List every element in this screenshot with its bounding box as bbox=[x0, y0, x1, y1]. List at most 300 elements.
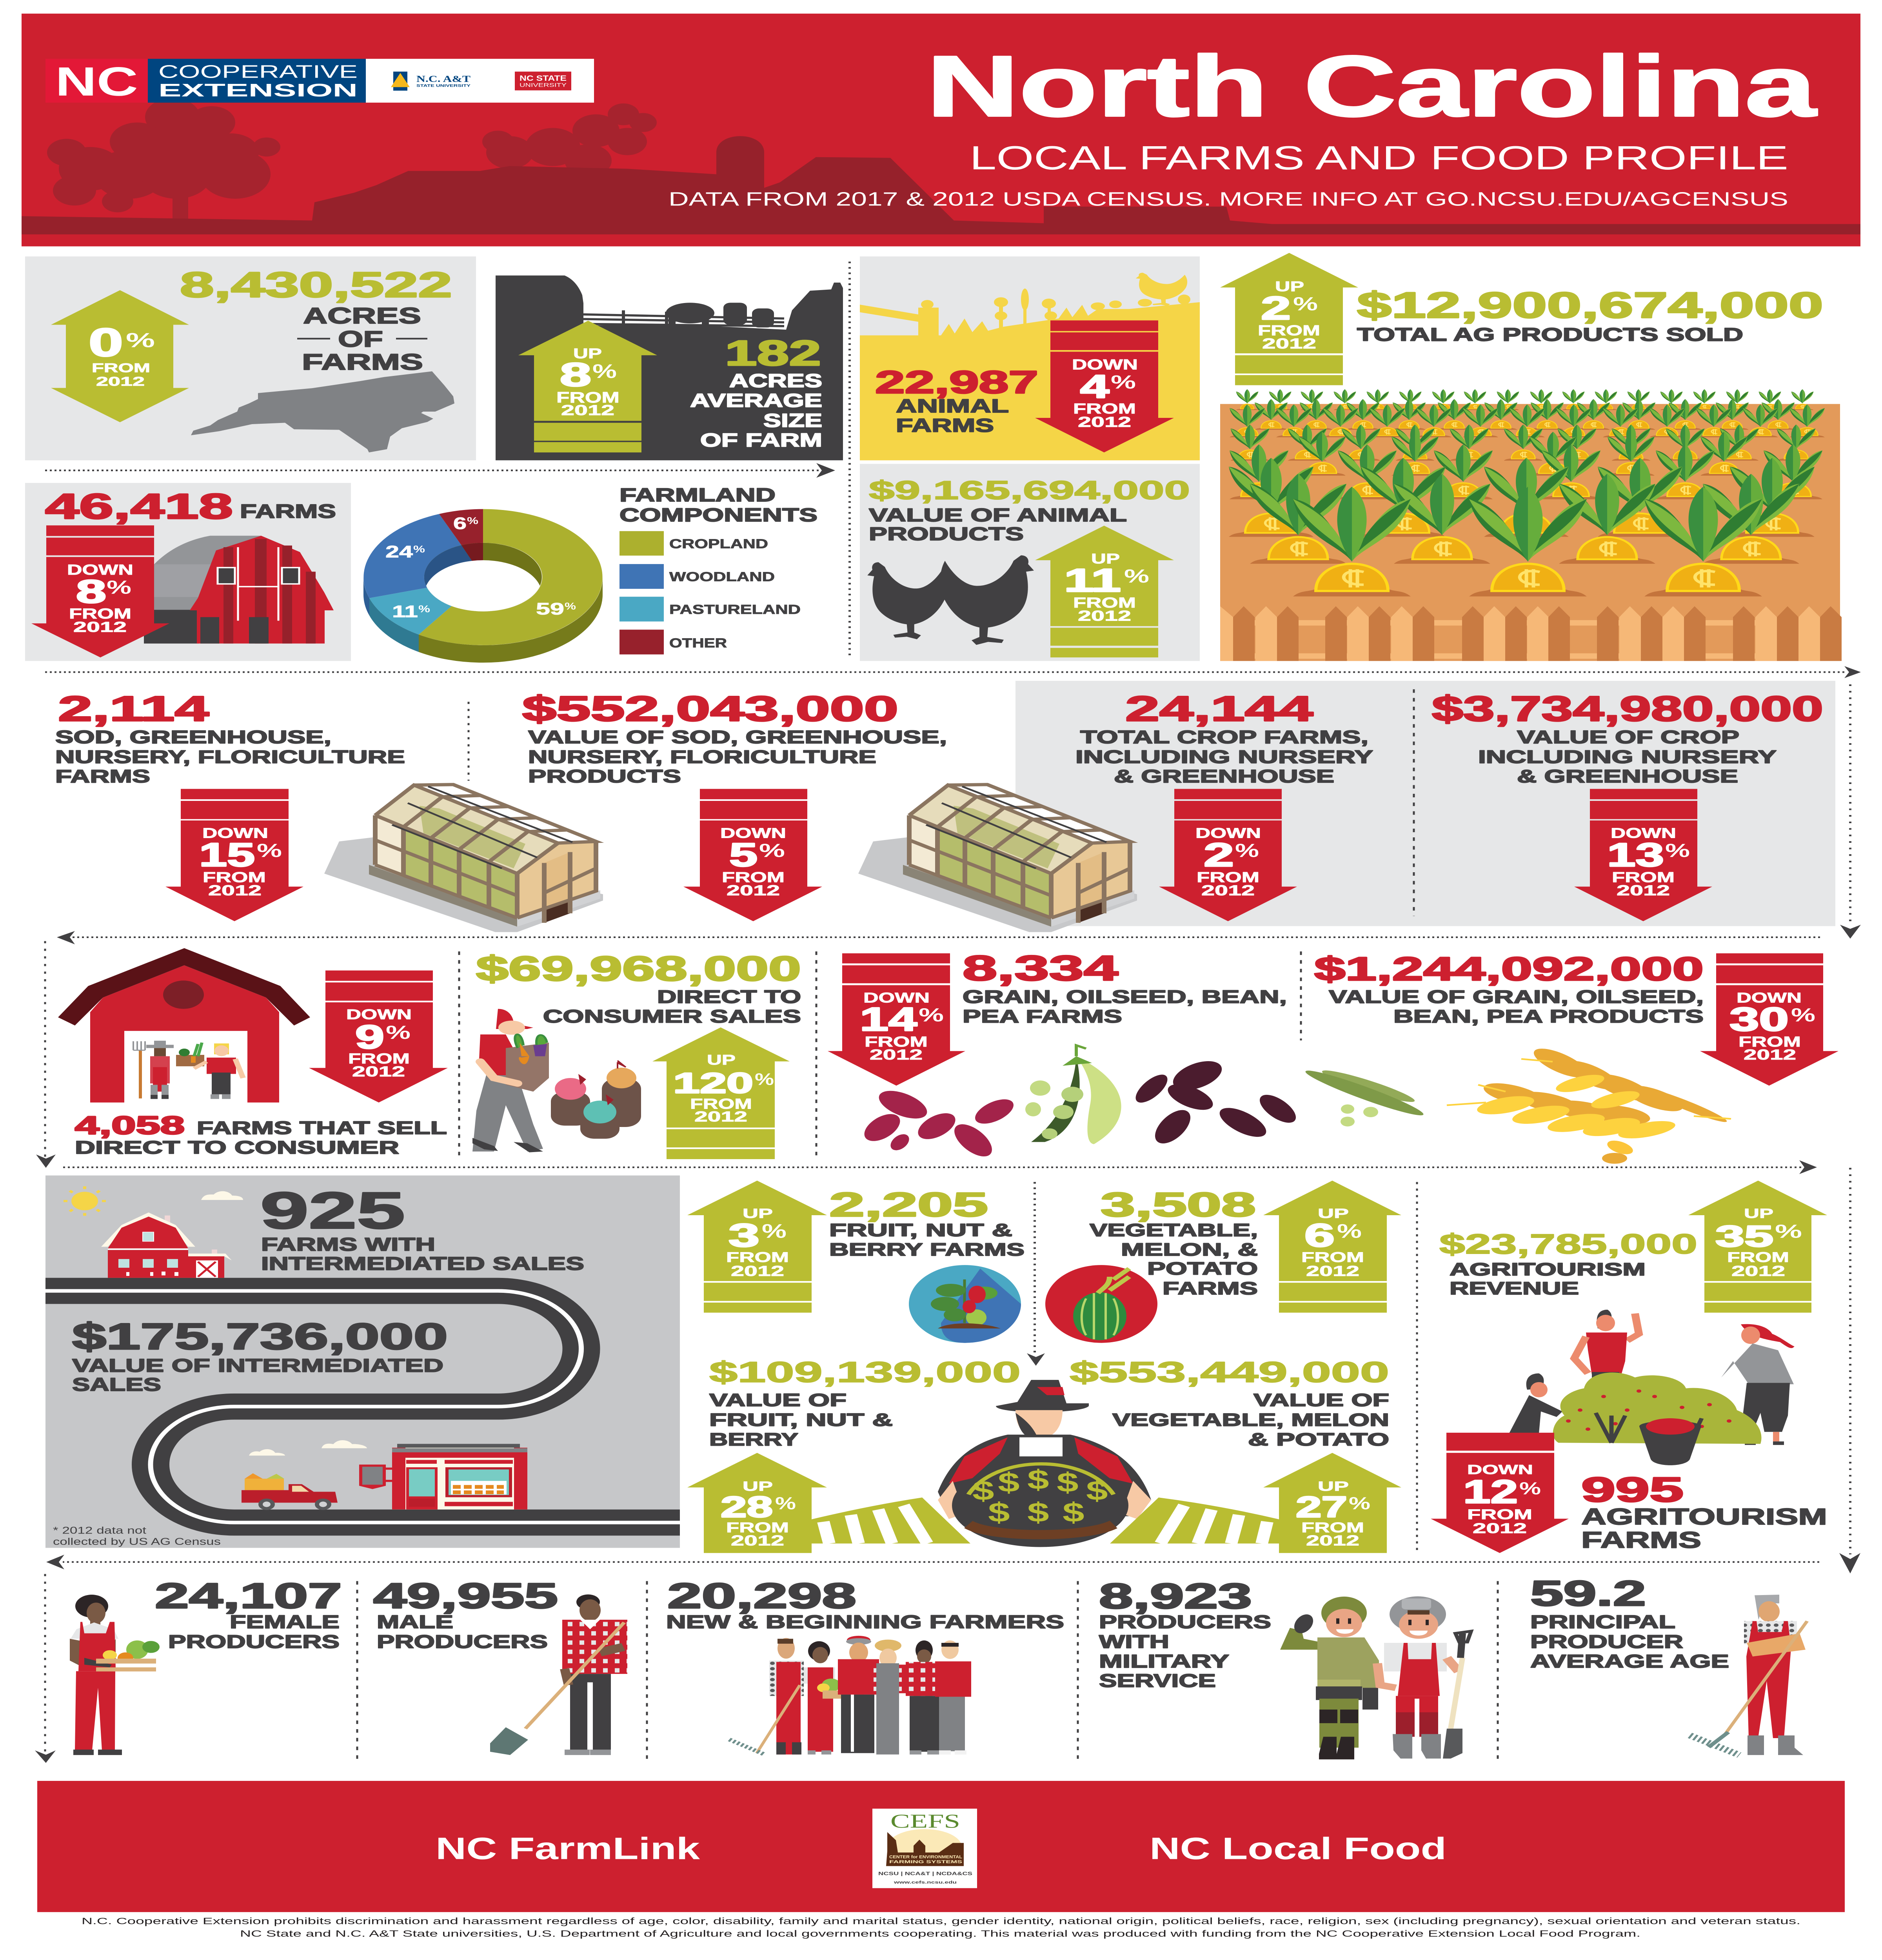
arrow: row five flow bbox=[46, 1555, 1819, 1569]
panel: crop farms background bbox=[1015, 681, 1835, 926]
agritourism revenue figure: $23,785,000 bbox=[1439, 1228, 1697, 1259]
animal farms figure: 22,987 bbox=[875, 365, 1038, 400]
up arrow: 27% from 2012: 27 bbox=[1296, 1490, 1347, 1523]
down arrow: 13% from 2012 bbox=[1574, 789, 1712, 921]
vegetable value label: VALUE OF bbox=[1253, 1390, 1389, 1410]
fruit value label: VALUE OF bbox=[709, 1390, 847, 1410]
farm count figure: 46,418 bbox=[45, 486, 233, 526]
sod value label bbox=[528, 727, 947, 786]
donut chart: farmland components bbox=[363, 509, 603, 662]
sod value label: PRODUCTS bbox=[528, 766, 681, 786]
logo lockup: EXTENSION bbox=[158, 80, 358, 100]
picket fence bbox=[1220, 606, 1842, 661]
female producer figure: 24,107 bbox=[155, 1576, 342, 1615]
agritourism revenue label: AGRITOURISM bbox=[1450, 1259, 1646, 1279]
logo lockup: STATE UNIVERSITY bbox=[416, 84, 471, 88]
grain farms label: PEA FARMS bbox=[963, 1006, 1122, 1027]
down arrow: 2% from 2012: 2 bbox=[1204, 837, 1234, 873]
panel: acres of farms bbox=[25, 256, 476, 460]
direct sales label bbox=[543, 987, 801, 1027]
female producer label bbox=[168, 1612, 340, 1652]
up arrow: 120% from 2012: 120 bbox=[673, 1067, 753, 1099]
section: direct to consumer farms bbox=[58, 948, 448, 1158]
person crouching bbox=[1509, 1373, 1562, 1433]
down arrow: 9% from 2012: 2012 bbox=[352, 1063, 405, 1080]
down arrow: 15% from 2012: FROM bbox=[203, 869, 266, 886]
illustration: soldier saluting bbox=[1280, 1597, 1379, 1759]
subtitle: LOCAL FARMS AND FOOD PROFILE bbox=[970, 139, 1788, 176]
down arrow: 9% from 2012: FROM bbox=[348, 1050, 410, 1067]
legend: farmland components bbox=[619, 484, 817, 654]
icon: North Carolina map bbox=[191, 371, 454, 452]
crop value label: VALUE OF CROP bbox=[1517, 727, 1739, 747]
footnote: collected by US AG Census bbox=[53, 1536, 221, 1547]
legend item: cropland bbox=[619, 531, 768, 555]
up arrow: 8% from 2012: FROM bbox=[556, 389, 619, 406]
crop farms label: TOTAL CROP FARMS, bbox=[1080, 727, 1368, 747]
down arrow: 30% from 2012 bbox=[1700, 953, 1838, 1085]
slice label: 59%: % bbox=[565, 601, 576, 612]
fruit farms figure: 2,205 bbox=[829, 1186, 988, 1223]
crop value label bbox=[1478, 727, 1777, 786]
vegetable farms figure: 3,508 bbox=[1101, 1186, 1256, 1223]
down arrow: 15% from 2012: 2012 bbox=[208, 882, 262, 898]
customer bbox=[194, 1044, 243, 1099]
fruit value label: BERRY bbox=[709, 1430, 798, 1450]
down arrow: 4% from 2012: DOWN bbox=[1072, 356, 1138, 372]
dollar signs: $ bbox=[988, 1497, 1010, 1528]
up arrow: 11% from 2012: % bbox=[1124, 565, 1149, 587]
icon: watermelon bbox=[1045, 1265, 1157, 1343]
up arrow: 35% from 2012: FROM bbox=[1727, 1249, 1789, 1265]
person standing bbox=[1574, 1310, 1639, 1386]
arrow: vertical divider flow bbox=[848, 261, 851, 655]
footnote: * 2012 data not bbox=[53, 1525, 146, 1536]
illustration: kidney beans bbox=[857, 1085, 1020, 1161]
down arrow: 2% from 2012 bbox=[1159, 789, 1297, 921]
agritourism revenue label bbox=[1450, 1259, 1646, 1299]
up arrow: 11% from 2012: 11 bbox=[1064, 562, 1121, 599]
title: North Carolina bbox=[926, 38, 1817, 134]
illustration: farmer holding basket of dollars bbox=[938, 1380, 1151, 1547]
up arrow: 28% from 2012: UP bbox=[743, 1479, 773, 1494]
legend item: woodland: WOODLAND bbox=[669, 570, 775, 584]
intermediated farms figure: 925 bbox=[260, 1181, 405, 1240]
logo lockup: N.C. A&T bbox=[416, 74, 471, 84]
up arrow: 28% from 2012: FROM bbox=[726, 1520, 789, 1535]
military producers label: PRODUCERS bbox=[1099, 1612, 1271, 1632]
section: female producers bbox=[70, 1576, 342, 1755]
legal disclaimer: N.C. Cooperative Extension prohibits discrimination and harassment regardless of age, color, disability, family and marital status, gender identity, national origin, political beliefs, race, religion, sex (including pregnancy), sexual orientation and veteran status. bbox=[82, 1916, 1800, 1926]
icon: greenhouse bbox=[858, 784, 1137, 932]
agritourism farms figure: 995 bbox=[1581, 1470, 1684, 1509]
section: value of crops bbox=[1432, 689, 1823, 921]
down arrow: 14% from 2012 bbox=[828, 953, 965, 1085]
logo lockup: UNIVERSITY bbox=[520, 82, 567, 88]
agritourism farms label bbox=[1581, 1504, 1827, 1553]
fruit farms label: BERRY FARMS bbox=[829, 1240, 1025, 1259]
arrow: row two flow bbox=[45, 666, 1861, 678]
slice label: 6%: % bbox=[467, 515, 478, 526]
down arrow: 9% from 2012: % bbox=[386, 1022, 411, 1043]
up arrow: 35% from 2012: % bbox=[1775, 1220, 1802, 1242]
icon: barn with farmers bbox=[58, 948, 310, 1102]
section: value of grain oilseed bean pea bbox=[1314, 951, 1838, 1164]
data source line: DATA FROM 2017 & 2012 USDA CENSUS. MORE INFO AT GO.NCSU.EDU/AGCENSUS bbox=[669, 188, 1788, 210]
crop value label: INCLUDING NURSERY bbox=[1478, 747, 1777, 767]
up arrow: 3% from 2012: UP bbox=[743, 1206, 773, 1221]
up arrow: 120% from 2012: UP bbox=[707, 1052, 736, 1068]
icon: cloud bbox=[201, 1191, 243, 1200]
up arrow: 3% from 2012: 3 bbox=[728, 1217, 759, 1254]
slice label: 6%: 6 bbox=[453, 514, 467, 533]
down arrow: 15% from 2012: 15 bbox=[199, 837, 255, 873]
down arrow: 13% from 2012: 13 bbox=[1607, 837, 1664, 873]
up arrow: 6% from 2012: FROM bbox=[1301, 1249, 1364, 1265]
icon: clouds over road bbox=[249, 1440, 367, 1455]
down arrow: 13% from 2012: 2012 bbox=[1617, 882, 1670, 898]
icon: red farmhouse bbox=[101, 1212, 232, 1278]
down arrow: 9% from 2012 bbox=[309, 971, 448, 1102]
vegetable value label: & POTATO bbox=[1248, 1430, 1389, 1450]
illustration: wheat bbox=[1447, 1044, 1731, 1164]
grain value figure: $1,244,092,000 bbox=[1314, 951, 1704, 987]
up arrow: 6% from 2012: 2012 bbox=[1306, 1263, 1359, 1279]
dollar signs: $ bbox=[1063, 1497, 1085, 1528]
vegetable value label: VEGETABLE, MELON bbox=[1112, 1410, 1389, 1430]
fruit value figure: $109,139,000 bbox=[709, 1356, 1021, 1388]
illustration: woman with crate bbox=[70, 1595, 160, 1755]
up arrow: 8% from 2012: 2012 bbox=[561, 402, 614, 418]
military producers label: WITH bbox=[1099, 1632, 1169, 1652]
illustration: man with shovel bbox=[490, 1594, 627, 1755]
up arrow: 2% from 2012 bbox=[1220, 253, 1358, 385]
footer banner bbox=[37, 1781, 1845, 1912]
section: sod and greenhouse farms bbox=[55, 689, 603, 932]
logo lockup: NC STATE bbox=[520, 74, 567, 83]
up arrow: 2% from 2012: % bbox=[1293, 293, 1318, 314]
up arrow: 120% from 2012: FROM bbox=[690, 1096, 752, 1112]
legend item: other: OTHER bbox=[669, 636, 727, 650]
intermediated value label: SALES bbox=[72, 1374, 161, 1395]
animal value label: PRODUCTS bbox=[869, 524, 1024, 544]
down arrow: 12% from 2012: 2012 bbox=[1473, 1521, 1527, 1536]
slice label: 24% bbox=[385, 543, 425, 561]
up arrow: 2% from 2012: 2 bbox=[1261, 290, 1291, 326]
logo lockup: NC bbox=[55, 59, 138, 104]
average size label: AVERAGE bbox=[690, 390, 822, 411]
legend item: pastureland: PASTURELAND bbox=[669, 602, 801, 617]
sod farms figure: 2,114 bbox=[58, 689, 209, 728]
rake bbox=[729, 1685, 800, 1755]
section: vegetable melon potato farms bbox=[1045, 1181, 1401, 1343]
section: agritourism bbox=[1431, 1181, 1827, 1553]
up arrow: 2% from 2012: 2012 bbox=[1262, 335, 1316, 352]
military producers label bbox=[1099, 1612, 1271, 1691]
sod farms label: FARMS bbox=[55, 766, 150, 786]
icon: pickup truck bbox=[242, 1473, 338, 1510]
arrow: right side flow bbox=[1840, 684, 1861, 938]
fruit value label: FRUIT, NUT & bbox=[709, 1410, 893, 1430]
farmer three bbox=[838, 1636, 879, 1753]
down arrow: 5% from 2012 bbox=[683, 789, 822, 921]
illustration: shopper with grocery bag bbox=[472, 1009, 549, 1152]
icon: yellow farmyard bbox=[860, 273, 1200, 460]
road bbox=[45, 1291, 680, 1523]
farmer one bbox=[769, 1638, 804, 1755]
animal value figure: $9,165,694,000 bbox=[869, 475, 1190, 505]
animal value label bbox=[869, 505, 1127, 544]
down arrow: 30% from 2012: DOWN bbox=[1737, 990, 1802, 1006]
dollar signs: $ bbox=[1027, 1465, 1049, 1495]
logo: CEFS: www.cefs.ncsu.edu bbox=[894, 1880, 957, 1884]
fruit farms label bbox=[829, 1220, 1025, 1259]
slice label: 24%: 24 bbox=[385, 543, 413, 561]
arrow: left side flow bbox=[36, 941, 56, 1168]
icon: strawberry plant bbox=[909, 1265, 1021, 1343]
acres of farms label bbox=[297, 303, 427, 375]
average size label: SIZE bbox=[763, 410, 822, 431]
up arrow: 3% from 2012: 2012 bbox=[731, 1263, 784, 1279]
military producers label: SERVICE bbox=[1099, 1671, 1216, 1691]
vegetable farms label: MELON, & bbox=[1121, 1240, 1258, 1259]
section: producer average age bbox=[1530, 1573, 1807, 1755]
animal farms label bbox=[896, 395, 1009, 436]
direct sale farms figure: 4,058 bbox=[75, 1111, 185, 1140]
footer partner: NC Local Food: NC Local Food bbox=[1150, 1831, 1446, 1866]
panel: total farms bbox=[25, 483, 351, 661]
ag products label: TOTAL AG PRODUCTS SOLD bbox=[1357, 324, 1743, 345]
arrow: left side lower flow bbox=[35, 1574, 56, 1763]
down arrow: 15% from 2012 bbox=[165, 789, 303, 921]
direct sale farms label: DIRECT TO CONSUMER bbox=[75, 1138, 399, 1158]
header banner bbox=[22, 14, 1860, 246]
section: new and beginning farmers bbox=[666, 1576, 1064, 1755]
down arrow: 5% from 2012: 5 bbox=[729, 837, 758, 873]
section: grain oilseed bean pea farms bbox=[828, 948, 1427, 1161]
down arrow: 13% from 2012: FROM bbox=[1612, 869, 1675, 886]
icon: greenhouse bbox=[324, 784, 603, 932]
up arrow: 11% from 2012 bbox=[1035, 526, 1174, 657]
icon: red barn bbox=[144, 536, 334, 644]
grain value label bbox=[1329, 987, 1704, 1027]
fruit value label bbox=[709, 1390, 893, 1450]
grain farms label bbox=[963, 987, 1287, 1027]
agritourism farms label: FARMS bbox=[1581, 1528, 1701, 1553]
fruit farms label: FRUIT, NUT & bbox=[829, 1220, 1012, 1240]
down arrow: 2% from 2012: % bbox=[1235, 840, 1259, 861]
average age label: PRINCIPAL bbox=[1530, 1612, 1675, 1632]
double arrow: 0% from 2012: 0 bbox=[89, 320, 123, 365]
up arrow: 8% from 2012 bbox=[518, 321, 657, 452]
sod farms label: NURSERY, FLORICULTURE bbox=[55, 747, 405, 767]
down arrow: 8% from 2012: DOWN bbox=[67, 562, 133, 578]
average size label bbox=[690, 370, 822, 450]
up arrow: 6% from 2012 bbox=[1263, 1181, 1401, 1313]
footer partner: NC FarmLink: NC FarmLink bbox=[436, 1831, 700, 1866]
up arrow: 6% from 2012: 6 bbox=[1304, 1217, 1335, 1254]
illustration: older farmer with rake bbox=[1690, 1595, 1807, 1755]
vegetable farms label: FARMS bbox=[1163, 1279, 1258, 1299]
down arrow: 8% from 2012 bbox=[31, 525, 169, 657]
up arrow: 3% from 2012: FROM bbox=[726, 1249, 789, 1265]
logo: CEFS: NCSU | NCA&T | NCDA&CS bbox=[878, 1871, 972, 1877]
up arrow: 28% from 2012: 2012 bbox=[731, 1532, 784, 1548]
male producer label: MALE bbox=[377, 1612, 453, 1632]
arrow: down to row five bbox=[1839, 1553, 1860, 1573]
section: value of vegetable melon potato bbox=[1070, 1356, 1401, 1553]
crate of vegetables bbox=[176, 1043, 204, 1066]
arrow: row three flow bbox=[57, 931, 1820, 944]
animal value label: VALUE OF ANIMAL bbox=[869, 505, 1127, 525]
dollar signs: $ bbox=[1057, 1467, 1079, 1498]
up arrow: 2% from 2012: UP bbox=[1275, 279, 1304, 294]
bush berries bbox=[1566, 1389, 1731, 1431]
acres of farms label: FARMS bbox=[302, 349, 423, 375]
logo: CEFS bbox=[872, 1809, 977, 1888]
intermediated value label bbox=[72, 1355, 443, 1395]
section: male producers bbox=[373, 1576, 627, 1755]
agritourism farms label: AGRITOURISM bbox=[1581, 1504, 1827, 1530]
down arrow: 12% from 2012: FROM bbox=[1467, 1506, 1532, 1523]
logo: CEFS: FARMING SYSTEMS bbox=[889, 1859, 962, 1864]
average age label: AVERAGE AGE bbox=[1530, 1651, 1729, 1672]
down arrow: 13% from 2012: DOWN bbox=[1611, 825, 1676, 841]
agritourism revenue label: REVENUE bbox=[1450, 1279, 1579, 1299]
down arrow: 4% from 2012: FROM bbox=[1073, 400, 1136, 417]
average size label: ACRES bbox=[729, 370, 822, 391]
down arrow: 14% from 2012: DOWN bbox=[863, 990, 930, 1006]
up arrow: 120% from 2012: % bbox=[755, 1070, 774, 1089]
down arrow: 14% from 2012: FROM bbox=[865, 1033, 928, 1050]
slice label: 11%: 11 bbox=[392, 602, 418, 621]
direct sales label: CONSUMER SALES bbox=[543, 1006, 801, 1027]
down arrow: 30% from 2012: 2012 bbox=[1744, 1047, 1796, 1063]
female producer label: FEMALE bbox=[230, 1612, 340, 1632]
illustration: farmer with spade bbox=[1377, 1596, 1471, 1759]
down arrow: 15% from 2012: % bbox=[257, 840, 282, 861]
down arrow: 8% from 2012: % bbox=[107, 576, 131, 598]
average size label: OF FARM bbox=[700, 429, 822, 450]
up arrow: 8% from 2012: UP bbox=[573, 346, 602, 361]
down arrow: 5% from 2012: DOWN bbox=[720, 825, 786, 841]
up arrow: 8% from 2012: % bbox=[592, 361, 617, 382]
vegetable farms label bbox=[1090, 1220, 1258, 1299]
legend item: pastureland bbox=[619, 597, 801, 621]
crop value label: & GREENHOUSE bbox=[1517, 766, 1738, 786]
legend heading bbox=[619, 484, 817, 525]
grain farms figure: 8,334 bbox=[963, 948, 1118, 988]
section: value of fruit nut berry bbox=[687, 1356, 1021, 1553]
grain farms label: GRAIN, OILSEED, BEAN, bbox=[963, 987, 1287, 1007]
icon: market storefront bbox=[359, 1444, 527, 1510]
down arrow: 14% from 2012: 14 bbox=[860, 1001, 917, 1038]
section: military service producers bbox=[1099, 1576, 1471, 1759]
down arrow: 9% from 2012: DOWN bbox=[346, 1007, 412, 1022]
up arrow: 8% from 2012: 8 bbox=[560, 356, 591, 393]
crop farms label: & GREENHOUSE bbox=[1114, 766, 1334, 786]
grain value label: VALUE OF GRAIN, OILSEED, bbox=[1329, 987, 1704, 1007]
acres figure: 8,430,522 bbox=[180, 265, 452, 305]
down arrow: 4% from 2012: % bbox=[1111, 371, 1136, 392]
up arrow: 11% from 2012: UP bbox=[1091, 551, 1120, 567]
slice label: 6% bbox=[453, 514, 478, 533]
slice label: 11% bbox=[392, 602, 430, 621]
direct sales figure: $69,968,000 bbox=[476, 949, 801, 988]
illustration: black beans bbox=[1130, 1055, 1303, 1147]
panel: intermediated sales bbox=[45, 1176, 680, 1548]
crop value figure: $3,734,980,000 bbox=[1432, 689, 1823, 728]
down arrow: 4% from 2012 bbox=[1035, 320, 1174, 452]
direct sale farms label: FARMS THAT SELL bbox=[197, 1118, 447, 1138]
section: direct to consumer sales bbox=[472, 949, 801, 1159]
down arrow: 30% from 2012: 30 bbox=[1729, 1001, 1789, 1038]
illustration: green pods bbox=[1302, 1066, 1427, 1127]
male producer label: PRODUCERS bbox=[377, 1632, 548, 1652]
down arrow: 2% from 2012: 2012 bbox=[1201, 882, 1255, 898]
legend heading: COMPONENTS bbox=[619, 504, 817, 525]
icon: crop rows left bbox=[812, 1497, 970, 1544]
down arrow: 5% from 2012: % bbox=[759, 840, 785, 861]
down arrow: 8% from 2012: 2012 bbox=[73, 619, 127, 635]
up arrow: 11% from 2012: 2012 bbox=[1078, 607, 1131, 624]
vegetable value label bbox=[1112, 1390, 1389, 1450]
illustration: pea pod bbox=[1025, 1045, 1121, 1144]
new farmers label: NEW & BEGINNING FARMERS bbox=[666, 1612, 1064, 1632]
up arrow: 27% from 2012: UP bbox=[1318, 1479, 1349, 1494]
up arrow: 28% from 2012: % bbox=[775, 1494, 796, 1513]
animal farms label: FARMS bbox=[896, 414, 994, 436]
bush bbox=[1553, 1372, 1761, 1444]
up arrow: 3% from 2012 bbox=[687, 1181, 827, 1313]
down arrow: 12% from 2012: % bbox=[1519, 1478, 1541, 1498]
up arrow: 28% from 2012 bbox=[687, 1453, 827, 1553]
double arrow: 0% from 2012: 2012 bbox=[96, 374, 145, 388]
vegetable farms label: POTATO bbox=[1147, 1259, 1258, 1279]
farm silhouette bbox=[22, 98, 1860, 234]
female producer label: PRODUCERS bbox=[168, 1632, 340, 1652]
farmer with pitchfork bbox=[133, 1041, 174, 1099]
up arrow: 35% from 2012: 35 bbox=[1715, 1220, 1773, 1253]
illustration: group of farmers bbox=[729, 1636, 971, 1755]
down arrow: 30% from 2012: % bbox=[1791, 1004, 1815, 1025]
sod value label: NURSERY, FLORICULTURE bbox=[528, 747, 876, 767]
section: total crop farms bbox=[1075, 689, 1373, 921]
average age label: PRODUCER bbox=[1530, 1632, 1683, 1652]
slice label: 59%: 59 bbox=[536, 599, 564, 618]
panel: value of animal products bbox=[860, 464, 1200, 661]
dollar signs: $ bbox=[972, 1475, 994, 1506]
up arrow: 35% from 2012: 2012 bbox=[1731, 1263, 1785, 1279]
double arrow: 0% from 2012 bbox=[51, 290, 189, 422]
down arrow: 13% from 2012: % bbox=[1665, 840, 1690, 861]
new farmers figure: 20,298 bbox=[667, 1576, 856, 1615]
slice label: 59% bbox=[536, 599, 576, 618]
down arrow: 2% from 2012: DOWN bbox=[1195, 825, 1261, 841]
legal disclaimer: NC State and N.C. A&T State universities, U.S. Department of Agriculture and local governments cooperating. This material was produced with funding from the NC Cooperative Extension Local Food Program. bbox=[240, 1929, 1640, 1939]
legend item: other bbox=[619, 630, 727, 654]
intermediated farms label: INTERMEDIATED SALES bbox=[261, 1254, 584, 1274]
legend heading: FARMLAND bbox=[619, 484, 776, 506]
illustration: coin carrot field bbox=[1220, 389, 1842, 661]
down arrow: 9% from 2012: 9 bbox=[355, 1018, 384, 1056]
farmer six bbox=[935, 1641, 971, 1755]
down arrow: 30% from 2012: FROM bbox=[1738, 1033, 1801, 1050]
intermediated farms label bbox=[261, 1234, 584, 1274]
section: fruit nut berry farms bbox=[687, 1181, 1025, 1343]
intermediated farms label: FARMS WITH bbox=[261, 1234, 435, 1255]
farms label: FARMS bbox=[240, 500, 336, 522]
